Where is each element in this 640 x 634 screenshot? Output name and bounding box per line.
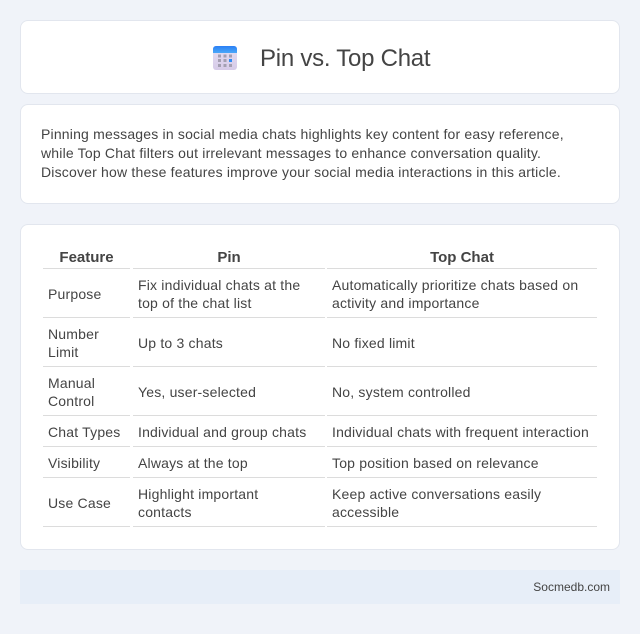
row: manual control: Control bbox=[48, 393, 94, 409]
footer bar bbox=[20, 570, 620, 604]
icon: calendar bbox=[213, 46, 237, 70]
table header: Top Chat bbox=[430, 249, 494, 266]
title: Pin vs. Top Chat bbox=[260, 45, 430, 72]
row: number limit: No fixed limit bbox=[332, 335, 415, 351]
row: manual control: Manual bbox=[48, 375, 95, 391]
intro text: Pinning messages in social media chats highlights key content for easy reference, bbox=[41, 126, 564, 142]
row: use case: Highlight important bbox=[138, 486, 258, 502]
row: visibility bbox=[48, 455, 539, 471]
row: purpose: Automatically prioritize chats based on bbox=[332, 277, 578, 293]
footer credit: Socmedb.com bbox=[533, 580, 610, 594]
row: visibility: Visibility bbox=[48, 455, 100, 471]
row: purpose: Purpose bbox=[48, 286, 101, 302]
row: chat types: Individual chats with frequent interaction bbox=[332, 424, 589, 440]
intro text: Discover how these features improve your social media interactions in this article. bbox=[41, 164, 561, 180]
row: number limit: Number bbox=[48, 326, 99, 342]
table header bbox=[59, 249, 494, 266]
row: purpose bbox=[48, 277, 578, 311]
row: visibility: Top position based on relevance bbox=[332, 455, 539, 471]
row: manual control: Yes, user-selected bbox=[138, 384, 256, 400]
table header: Pin bbox=[217, 249, 241, 266]
row: number limit bbox=[48, 326, 415, 360]
panel: comparison table bbox=[20, 224, 620, 550]
row: use case: Keep active conversations easily bbox=[332, 486, 541, 502]
row: manual control bbox=[48, 375, 471, 409]
row: use case: Use Case bbox=[48, 495, 111, 511]
row: purpose: activity and importance bbox=[332, 295, 480, 311]
row: purpose: Fix individual chats at the bbox=[138, 277, 300, 293]
intro text bbox=[41, 126, 564, 180]
row: purpose: top of the chat list bbox=[138, 295, 252, 311]
row: chat types bbox=[48, 424, 589, 440]
table header: Feature bbox=[59, 249, 114, 266]
row: use case bbox=[48, 486, 541, 520]
row: use case: contacts bbox=[138, 504, 192, 520]
row: chat types: Chat Types bbox=[48, 424, 120, 440]
row: visibility: Always at the top bbox=[138, 455, 248, 471]
row: use case: accessible bbox=[332, 504, 399, 520]
panel: introduction bbox=[20, 104, 620, 204]
intro text: while Top Chat filters out irrelevant messages to enhance conversation quality. bbox=[41, 145, 541, 161]
row: chat types: Individual and group chats bbox=[138, 424, 306, 440]
row: number limit: Up to 3 chats bbox=[138, 335, 223, 351]
panel: title card bbox=[20, 20, 620, 94]
row: manual control: No, system controlled bbox=[332, 384, 471, 400]
row: number limit: Limit bbox=[48, 344, 79, 360]
